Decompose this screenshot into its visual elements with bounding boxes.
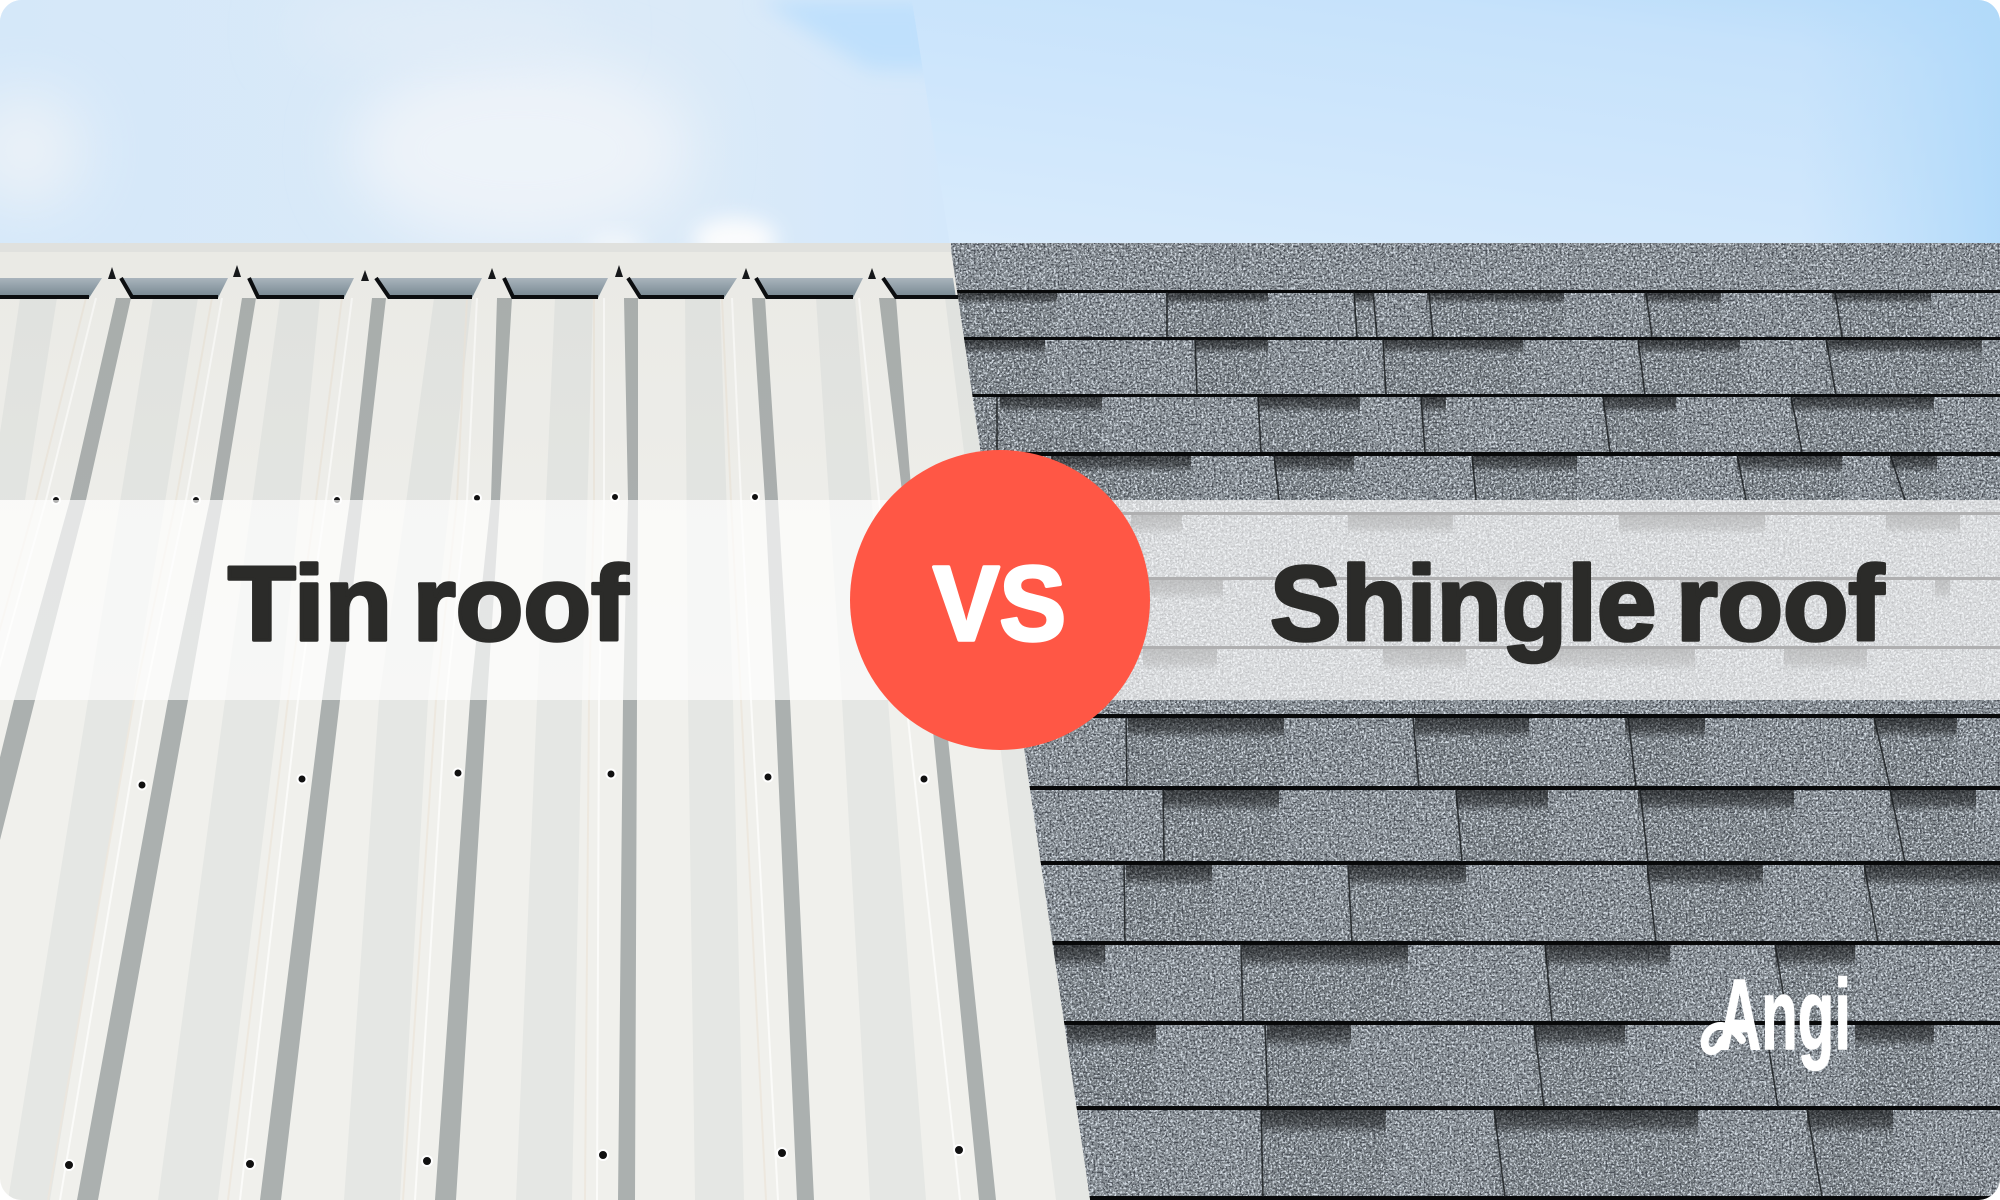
title: Shingle roof: Shingle roof bbox=[1270, 545, 1885, 663]
shingle tabs: darker tabs per row bbox=[950, 292, 2000, 1197]
logo wordmark: Angi bbox=[1718, 959, 1851, 1071]
badge circle bbox=[850, 450, 1150, 750]
upper sheet warm tint bbox=[0, 243, 1016, 700]
rib shadow strips bbox=[0, 298, 996, 1200]
shingle base surface bbox=[940, 243, 2000, 1200]
ridge cap top edge bbox=[0, 243, 951, 252]
shadow bands under each shingle course bbox=[950, 292, 2000, 1135]
rib cream lines bbox=[0, 298, 766, 1200]
granule texture light bbox=[940, 243, 2000, 1200]
title: Tin roof: Tin roof bbox=[228, 545, 629, 663]
metal sheet surface bbox=[0, 243, 1090, 1200]
Angi logo bbox=[1700, 976, 1848, 1072]
tin roof bbox=[0, 243, 1090, 1200]
badge label: VS bbox=[933, 545, 1066, 663]
vertical shingle joints bbox=[997, 292, 1905, 1197]
shingle roof bbox=[940, 243, 2000, 1200]
granule texture dark bbox=[940, 243, 2000, 1200]
ridge cap bbox=[0, 243, 951, 278]
VS badge bbox=[850, 450, 1150, 750]
logo swash bbox=[1705, 1026, 1742, 1051]
translucent label band bbox=[0, 500, 2000, 700]
gutter shadows between ribs bbox=[0, 278, 956, 298]
sheet screws bbox=[52, 493, 964, 1170]
sky background bbox=[0, 0, 2000, 262]
rib highlight lines bbox=[0, 298, 960, 1200]
gutter black lines bbox=[0, 278, 958, 297]
lighter valley bands bbox=[0, 298, 1090, 1200]
course lines bbox=[940, 290, 2000, 1200]
ridge screws bbox=[108, 265, 876, 281]
